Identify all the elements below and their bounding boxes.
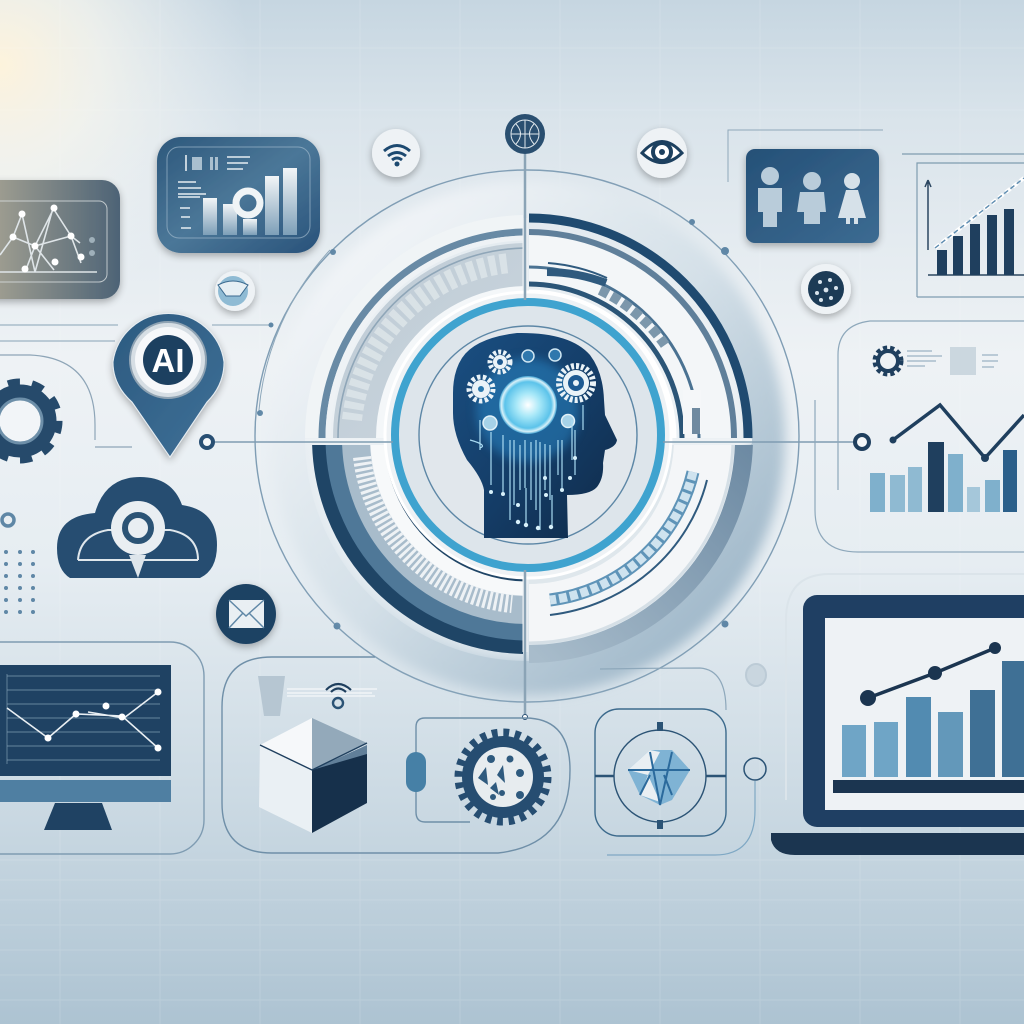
panel: people card — [728, 130, 883, 243]
pin: AI — [113, 313, 224, 457]
text: AI: AI — [152, 342, 184, 379]
panel: bar chart card — [157, 137, 320, 253]
laptop trend — [868, 648, 995, 698]
cloud — [57, 477, 217, 578]
panel: laptop — [771, 574, 1024, 855]
quadrant: lower left — [312, 445, 523, 654]
dividers — [305, 218, 752, 652]
glow halo — [476, 358, 580, 462]
cube — [259, 718, 367, 833]
panel: line chart card — [0, 180, 120, 299]
note lines — [907, 351, 998, 367]
ring and line: lower right — [607, 664, 766, 855]
screen — [0, 665, 171, 776]
chart: top-right bar chart — [902, 154, 1024, 297]
ring: inner thin — [419, 326, 637, 544]
monitor base — [0, 780, 171, 802]
laptop bars — [842, 661, 1024, 777]
icon: eye — [637, 128, 687, 178]
quadrant: lower right — [529, 445, 753, 663]
wifi note — [258, 676, 377, 716]
pill — [406, 752, 426, 792]
small gear — [875, 348, 901, 374]
diamond — [628, 750, 690, 805]
quadrant: upper left — [318, 215, 523, 438]
dot grid and small ring — [2, 514, 35, 614]
laptop base — [771, 833, 1024, 855]
bars — [870, 442, 1017, 512]
glowing core — [499, 376, 557, 434]
connector lines: left — [0, 322, 274, 447]
icon: person right — [838, 173, 866, 224]
gears inside head — [469, 349, 593, 430]
trend line — [893, 405, 1024, 458]
head silhouette — [453, 333, 617, 538]
panel: right line and bar chart — [815, 321, 1024, 552]
connector lines: through centre — [201, 154, 855, 720]
quadrant: upper right — [529, 214, 752, 438]
ring: blue — [395, 302, 661, 568]
gear: left — [0, 384, 57, 458]
gear: bottom — [459, 733, 547, 821]
circuit traces — [470, 405, 583, 530]
connector node — [855, 435, 869, 449]
icon: person left — [758, 167, 782, 227]
panel: diamond — [595, 709, 726, 836]
icon: small bowl badge — [215, 271, 255, 311]
ring: outer thin circle — [255, 170, 799, 702]
icon: wifi badge — [372, 129, 420, 177]
icon: globe — [505, 114, 545, 154]
icon: envelope — [216, 584, 276, 644]
icon: network badge — [801, 264, 851, 314]
panel: cube and gear — [222, 657, 726, 853]
main dial — [288, 198, 768, 678]
inner disc — [385, 292, 671, 578]
panel: monitor — [0, 642, 204, 854]
icon: person centre — [797, 172, 826, 224]
